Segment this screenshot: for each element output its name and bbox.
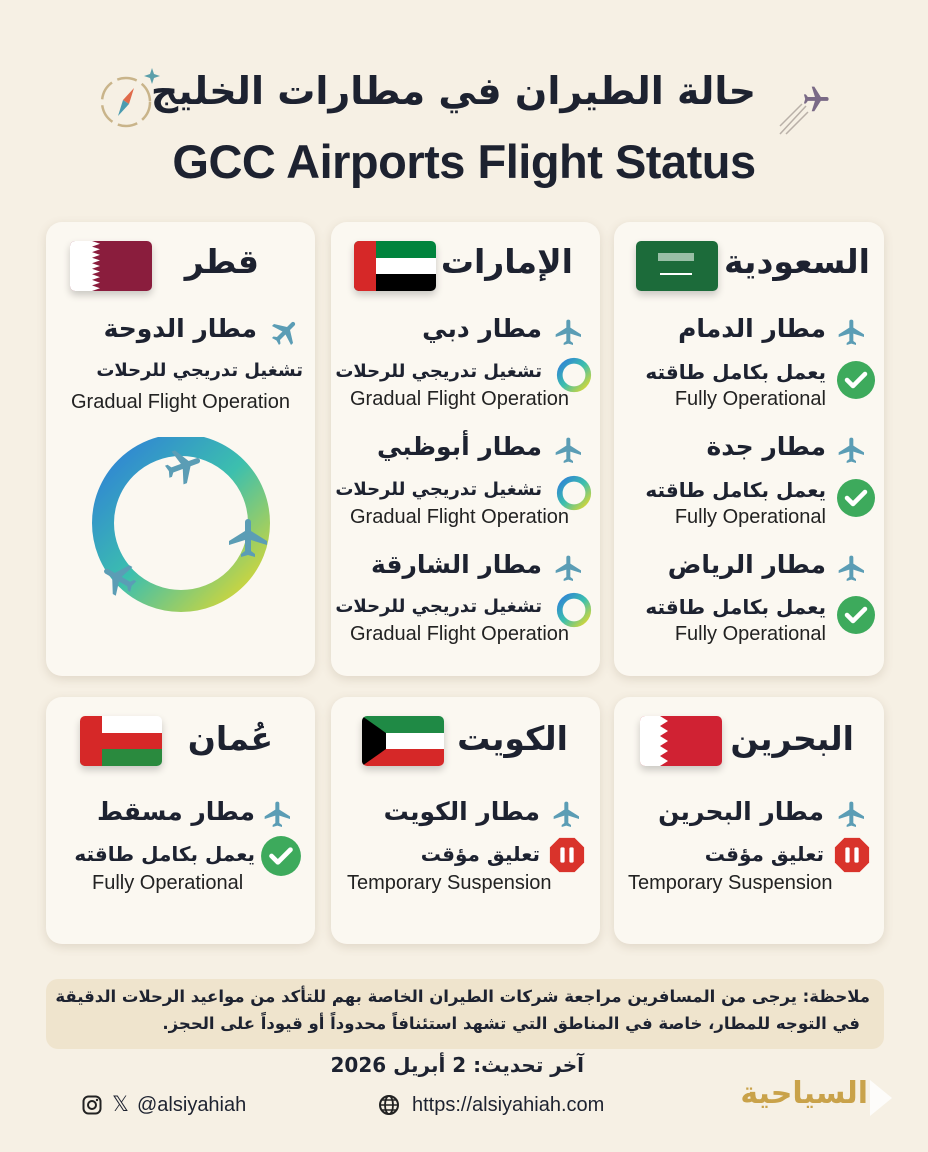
panel: saudi: Fully Operational bbox=[675, 388, 826, 410]
airport: riyadh: مطار الرياض bbox=[668, 550, 826, 579]
logo: السياحية bbox=[740, 1076, 868, 1111]
flag: uae bbox=[354, 241, 436, 291]
airport: abu dhabi: مطار أبوظبي bbox=[377, 432, 542, 461]
flag: bahrain bbox=[640, 716, 722, 766]
airport: kuwait: مطار الكويت bbox=[384, 797, 540, 826]
english title: GCC Airports Flight Status bbox=[172, 135, 756, 188]
text: last update: آخر تحديث: 2 أبريل 2026 bbox=[331, 1053, 584, 1077]
panel: qatar bbox=[46, 222, 315, 676]
airport: sharjah: مطار الشارقة bbox=[371, 550, 542, 579]
airport: jeddah: مطار جدة bbox=[706, 432, 826, 461]
panel: saudi: يعمل بكامل طاقته bbox=[645, 360, 826, 384]
flag: kuwait bbox=[362, 716, 444, 766]
panel: uae: تشغيل تدريجي للرحلات bbox=[335, 361, 542, 382]
footer: website: https://alsiyahiah.com bbox=[412, 1094, 604, 1116]
airport: bahrain: مطار البحرين bbox=[658, 797, 824, 826]
heading: uae: الإمارات bbox=[441, 242, 573, 281]
callout: note: ملاحظة: يرجى من المسافرين مراجعة شركات الطيران الخاصة بهم للتأكد من مواعيد الرحلات الدقيقة bbox=[55, 987, 870, 1006]
panel: qatar: تشغيل تدريجي للرحلات bbox=[96, 360, 303, 381]
title bbox=[101, 68, 829, 188]
airport: muscat: مطار مسقط bbox=[97, 797, 255, 826]
footer: social: @alsiyahiah bbox=[137, 1094, 246, 1116]
airport: doha: مطار الدوحة bbox=[104, 314, 257, 343]
heading: bahrain: البحرين bbox=[730, 719, 854, 758]
icon: compass bbox=[101, 68, 160, 128]
panel: saudi bbox=[614, 222, 884, 676]
icon: flying plane bbox=[780, 86, 829, 134]
heading: saudi: السعودية bbox=[724, 242, 870, 281]
panel: uae: تشغيل تدريجي للرحلات bbox=[335, 479, 542, 500]
panel: bahrain: Temporary Suspension bbox=[628, 872, 833, 894]
panel: oman bbox=[46, 697, 315, 944]
callout: note: في التوجه للمطار، خاصة في المناطق التي تشهد استئنافاً محدوداً أو قيوداً على الحجز. bbox=[162, 1014, 860, 1033]
footer: social bbox=[82, 1092, 246, 1116]
chart: ring bbox=[92, 437, 270, 612]
panel: oman: Fully Operational bbox=[92, 872, 243, 894]
airport: dubai: مطار دبي bbox=[422, 314, 542, 343]
panel: bahrain bbox=[614, 697, 884, 944]
panel: saudi: يعمل بكامل طاقته bbox=[645, 478, 826, 502]
panel: oman: يعمل بكامل طاقته bbox=[74, 842, 255, 866]
callout: note bbox=[46, 979, 884, 1049]
heading: kuwait: الكويت bbox=[457, 719, 568, 758]
heading: oman: عُمان bbox=[188, 719, 273, 758]
panel: uae: Gradual Flight Operation bbox=[350, 623, 569, 645]
footer: social: 𝕏 bbox=[112, 1092, 129, 1116]
panel: qatar: Gradual Flight Operation bbox=[71, 391, 290, 413]
panel: bahrain: تعليق مؤقت bbox=[705, 842, 824, 866]
panel: uae: تشغيل تدريجي للرحلات bbox=[335, 596, 542, 617]
panel: kuwait: تعليق مؤقت bbox=[421, 842, 540, 866]
panel: saudi: يعمل بكامل طاقته bbox=[645, 595, 826, 619]
flag: saudi bbox=[636, 241, 718, 291]
flag: qatar bbox=[70, 241, 152, 291]
panel: uae: Gradual Flight Operation bbox=[350, 506, 569, 528]
airport: dammam: مطار الدمام bbox=[678, 314, 826, 343]
panel: kuwait bbox=[331, 697, 600, 944]
heading: qatar: قطر bbox=[185, 242, 259, 281]
panel: uae: Gradual Flight Operation bbox=[350, 388, 569, 410]
panel: uae bbox=[331, 222, 600, 676]
panel: saudi: Fully Operational bbox=[675, 506, 826, 528]
panel: saudi: Fully Operational bbox=[675, 623, 826, 645]
panel: kuwait: Temporary Suspension bbox=[347, 872, 552, 894]
arabic title: حالة الطيران في مطارات الخليج bbox=[151, 69, 756, 113]
flag: oman bbox=[80, 716, 162, 766]
